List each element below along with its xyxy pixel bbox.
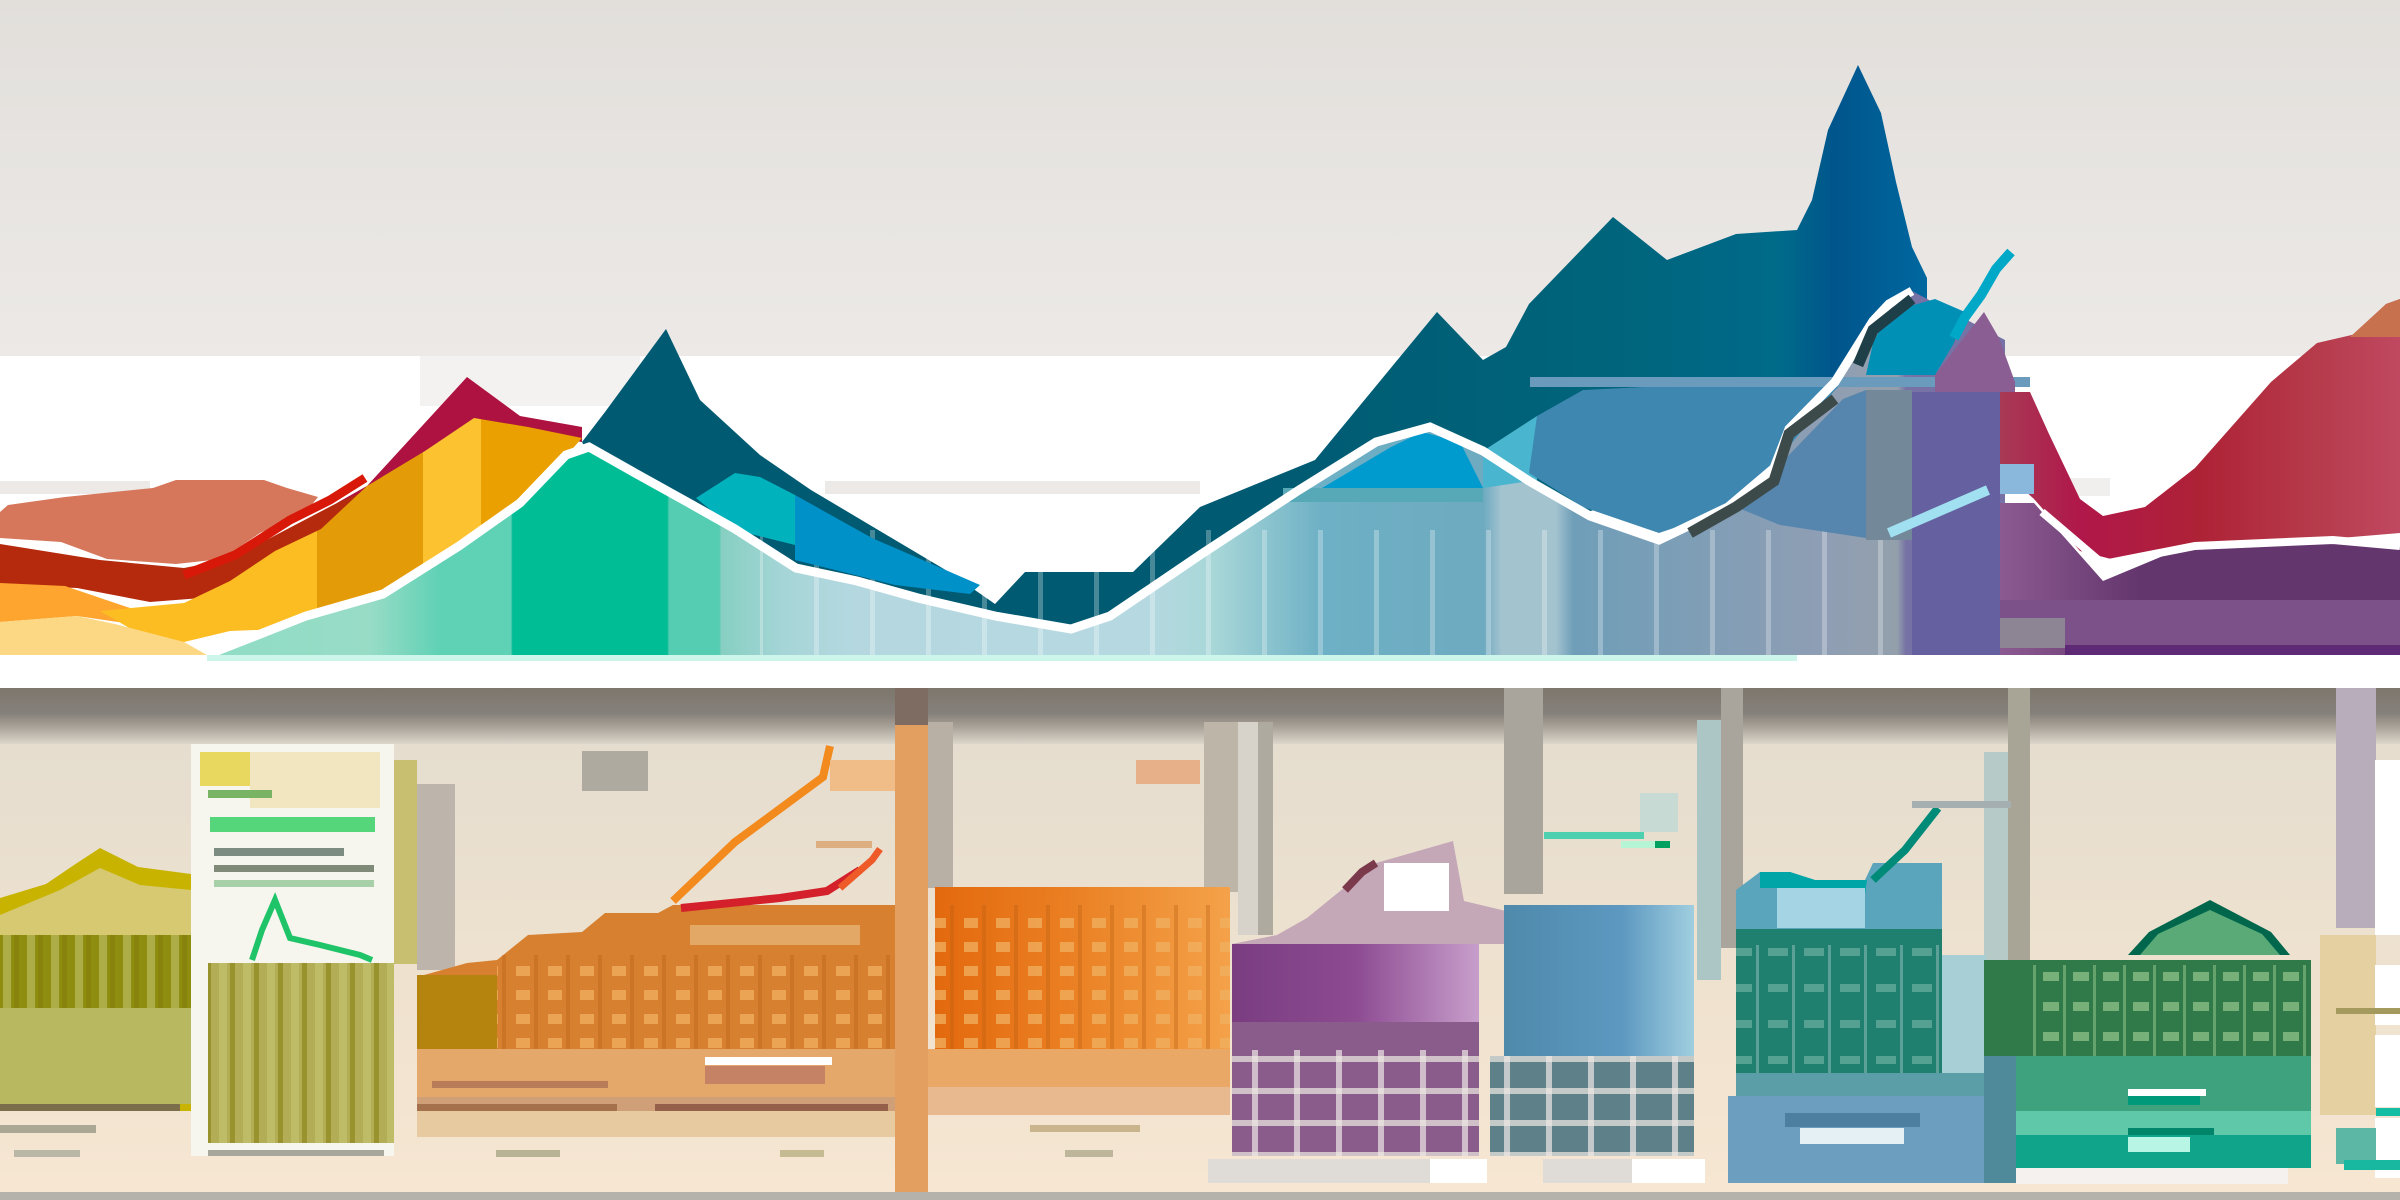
skyline silhouette	[417, 905, 895, 1049]
margin grey lilac column	[2336, 688, 2376, 928]
section: teal tower	[1728, 801, 2011, 1183]
panel: lower city strip	[0, 688, 2400, 1200]
tower white window	[1384, 863, 1449, 911]
column: tan left of purple	[1204, 722, 1238, 892]
block windows	[935, 905, 1230, 1049]
bar: green tip	[1655, 841, 1670, 848]
area: orange band	[0, 583, 138, 625]
section: purple tower	[1208, 841, 1506, 1183]
tower top	[1736, 863, 1942, 935]
line: red trend left	[184, 478, 365, 575]
margin white panel three	[2375, 1035, 2400, 1107]
margin teal tab	[2376, 1108, 2400, 1116]
card grey bars	[214, 848, 344, 856]
tower plaid	[1490, 1056, 1694, 1156]
area: orange corner	[2350, 299, 2400, 337]
base label white	[1800, 1128, 1904, 1144]
area: lighter purple floor	[2000, 600, 2400, 645]
area chart	[0, 65, 2400, 661]
card yellow header	[200, 752, 270, 786]
column: grey teal	[1697, 720, 1721, 980]
lower tan band	[417, 1049, 895, 1097]
tower hump	[2140, 910, 2280, 955]
tower light band	[2016, 1111, 2311, 1135]
area: blue slope left	[795, 495, 980, 594]
card green chip	[208, 790, 272, 798]
hill	[0, 848, 191, 1111]
margin white panels	[2375, 760, 2400, 935]
white plinth	[2016, 1168, 2288, 1184]
area: purple right floor	[2000, 503, 2400, 655]
panel background	[0, 688, 2400, 1192]
column: grey blue	[1504, 688, 1543, 894]
card tan edge	[394, 760, 417, 964]
dark caption right	[655, 1104, 888, 1111]
tan caption band	[417, 1097, 895, 1115]
block lower band	[928, 1087, 1230, 1115]
label dark teal	[2128, 1128, 2214, 1135]
pale caption band	[417, 1111, 895, 1137]
card: white report card	[191, 744, 455, 1156]
tower body	[1504, 905, 1694, 1056]
tower roof	[1232, 841, 1506, 944]
label teal	[2128, 1096, 2200, 1105]
line: dark shadow segment	[1690, 399, 1835, 533]
cloud note	[1640, 793, 1678, 832]
label white	[2128, 1089, 2206, 1096]
baseline glow	[207, 655, 1797, 661]
label: tan upper	[830, 760, 895, 791]
label: tan lower	[816, 841, 872, 848]
margin white panel four	[2375, 1118, 2400, 1178]
area: crimson right slope	[2000, 299, 2400, 559]
card cream header	[250, 752, 380, 808]
tower pale side	[1942, 955, 1986, 1085]
tower lower	[1490, 1056, 1694, 1156]
column: grey purple	[1258, 722, 1273, 935]
area: cyan hump left	[696, 473, 795, 545]
margin olive tab	[2336, 1008, 2400, 1014]
column: grey beside orange	[928, 722, 953, 888]
line: cyan upward trend	[1954, 252, 2011, 338]
pink label on skyline	[705, 1066, 825, 1084]
skyline highlight	[690, 925, 860, 945]
line: teal diagonal	[1873, 808, 1938, 880]
hill lower body	[0, 935, 191, 1010]
label: grey note	[582, 751, 648, 791]
card mini line chart	[252, 900, 372, 960]
section: orange skyline	[417, 905, 895, 1157]
tower body	[1736, 929, 1942, 1073]
skyline olive edge	[417, 975, 497, 1049]
area: blue glass bowl	[1529, 377, 1850, 533]
column: orange cap	[895, 688, 928, 725]
line: dark shadow upper	[1858, 299, 1912, 365]
hill inner	[0, 868, 191, 1000]
tower footer	[1208, 1159, 1430, 1183]
card body	[191, 744, 394, 1156]
line: white trend	[207, 291, 1912, 655]
area: cyan hump centre	[1322, 432, 1483, 488]
column: grey right of pale teal	[2008, 688, 2030, 960]
card footer text bar	[208, 1150, 384, 1156]
section: blue tower	[1490, 793, 1705, 1183]
line: pale cyan segment	[1889, 490, 1988, 533]
panel bottom band	[0, 1192, 2400, 1200]
white footer chip	[1632, 1159, 1705, 1183]
tower windows	[2030, 965, 2311, 1056]
tower teal band	[2016, 1135, 2311, 1168]
section: olive hill	[0, 848, 191, 1157]
block band	[928, 1049, 1230, 1087]
area: purple peak	[1935, 312, 2015, 392]
placeholder caption small	[14, 1150, 80, 1157]
base label dark	[1785, 1113, 1920, 1127]
section: orange block	[928, 887, 1230, 1157]
block caption small	[1065, 1150, 1113, 1157]
label: peach note	[1136, 760, 1200, 784]
chart lines: orange and red	[582, 746, 1200, 908]
tower line	[1345, 863, 1376, 890]
margin teal strip	[2344, 1160, 2400, 1170]
tower footer	[1543, 1159, 1633, 1183]
tower plaid	[1232, 1050, 1479, 1156]
area: dark teal mountain range	[582, 65, 1927, 655]
column: grey right of teal	[1721, 688, 1743, 948]
area: salmon band	[0, 480, 318, 564]
foreground glass streaks	[760, 530, 2000, 655]
bar: pale green marker	[1621, 841, 1661, 848]
line: orange red tail	[840, 849, 880, 888]
area: grey purple square	[2000, 618, 2065, 648]
line: white trend right	[2042, 512, 2400, 564]
area: amber slope	[100, 418, 582, 642]
card grey shadow	[417, 784, 455, 970]
white footer chip	[1430, 1159, 1487, 1183]
card pale green bar	[214, 880, 374, 887]
label pale	[2128, 1137, 2190, 1152]
area: lavender glass column	[1912, 392, 2000, 655]
dark caption left	[417, 1104, 617, 1111]
line: orange rise	[673, 746, 830, 901]
block caption	[1030, 1125, 1140, 1132]
area: blue glass right of bowl	[1736, 390, 1866, 538]
second brown label	[432, 1081, 608, 1088]
tower base teal column	[1984, 960, 2030, 1183]
area: slate glass column	[1866, 390, 1912, 540]
area: pale cyan hump edge	[1483, 416, 1537, 488]
area: translucent foreground	[207, 291, 2005, 655]
panel top shadow	[0, 688, 2400, 744]
block body	[935, 887, 1230, 1049]
hill base	[0, 1008, 191, 1104]
tower mid	[2016, 1056, 2311, 1111]
caption ticks right	[780, 1150, 824, 1157]
caption ticks	[496, 1150, 560, 1157]
marker: pale blue block	[2000, 464, 2034, 494]
hill dark strip	[0, 1104, 180, 1111]
section: right margin	[2320, 688, 2400, 1178]
line: red rise	[681, 870, 860, 908]
columns	[895, 688, 2030, 1192]
column: pale teal	[1984, 752, 2008, 962]
area: glass top edge	[1530, 377, 2030, 387]
area: cyan teal wedge	[1866, 299, 1965, 375]
column: orange	[895, 725, 928, 1192]
bar: teal flat marker	[1544, 832, 1644, 839]
skyline windows	[497, 955, 895, 1049]
tower highlight	[1777, 888, 1865, 928]
area: magenta peak	[337, 377, 582, 503]
tower windows	[1736, 945, 1942, 1073]
tower body	[1232, 944, 1479, 1022]
label: grey tag	[1912, 801, 2011, 808]
tower body	[1984, 960, 2311, 1056]
white label on skyline	[705, 1057, 832, 1065]
tower base	[1728, 1096, 1984, 1183]
column: pale purple side	[1238, 722, 1258, 935]
card green bar	[210, 817, 375, 832]
area: pale yellow foot	[0, 616, 207, 655]
card stripe panel	[208, 963, 394, 1143]
tower mid strip	[1736, 1073, 1984, 1097]
tower cyan rim	[1760, 872, 1867, 895]
area: pale foot below cyan hump	[1283, 488, 1483, 502]
area: red band	[0, 486, 367, 602]
margin teal block	[2336, 1128, 2376, 1164]
margin tan column	[2320, 935, 2376, 1115]
tower lower	[1232, 1022, 1479, 1156]
card grey bar two	[214, 865, 374, 872]
section: green tower	[1984, 900, 2311, 1184]
tower hump outline	[2128, 900, 2290, 955]
margin white panel two	[2375, 965, 2400, 1025]
area: dark purple baseline	[2065, 645, 2400, 655]
placeholder caption	[0, 1125, 96, 1133]
